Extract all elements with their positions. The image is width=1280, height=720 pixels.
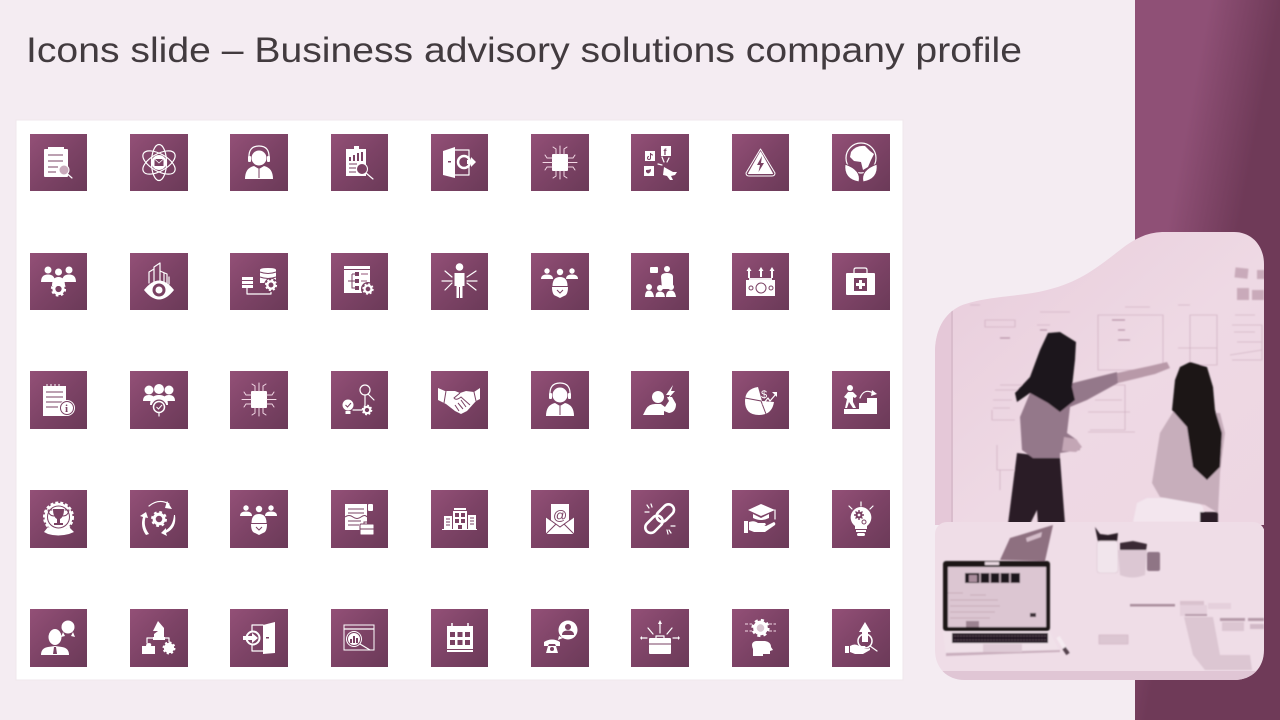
- icon: first aid kit: [832, 253, 890, 310]
- icon: circuit chip: [531, 134, 589, 191]
- photo: women at whiteboard and desk with laptop: [935, 230, 1265, 682]
- icon: graduation cap in hand: [732, 490, 789, 548]
- table surface: [935, 522, 1265, 682]
- icon: calendar: [431, 609, 488, 667]
- icon: high voltage warning: [732, 134, 789, 191]
- icon: chess knight strategy: [130, 609, 188, 667]
- icon: email envelope: @: [553, 507, 567, 523]
- icon: climbing stairs: [832, 371, 890, 429]
- icon: headset agent: [531, 371, 589, 429]
- icon: gear cycle: [130, 490, 188, 548]
- back laptop: [1000, 525, 1053, 561]
- front laptop: [943, 561, 1060, 656]
- icon: light bulb with gears: [832, 490, 890, 548]
- icon: briefcase expansion: [631, 609, 689, 667]
- icon: strength with lightning: [631, 371, 689, 429]
- icon: telephone contact: [531, 609, 589, 667]
- icon: database with gear: [230, 253, 288, 310]
- icon: door with gear arrow: [431, 134, 488, 191]
- icon: team with check badge: [130, 371, 188, 429]
- icon: person with directions: [431, 253, 488, 310]
- icon: head with gear idea: [732, 609, 789, 667]
- icon: eye with city: [130, 253, 188, 310]
- icon: hand with search arrow: [832, 609, 890, 667]
- icon: money rising: [732, 253, 789, 310]
- chair: [1133, 498, 1205, 522]
- icon: office buildings: [431, 490, 488, 548]
- title: Icons slide – Business advisory solutions company profile: [26, 30, 1022, 70]
- icon: atom with envelope: [130, 134, 188, 191]
- icon: browser analytics: [331, 609, 388, 667]
- icon: workers with gear: [230, 490, 288, 548]
- icon: clipboard with magnifier: [30, 134, 87, 191]
- icon: email envelope: [531, 490, 589, 548]
- icon: workers with gear: [531, 253, 589, 310]
- icon: notepad with info: i: [65, 403, 68, 415]
- icon: globe with leaves: [832, 134, 890, 191]
- icon: broken link: [631, 490, 689, 548]
- icon: document with briefcase: [331, 490, 388, 548]
- icon: social media megaphone: f: [664, 147, 668, 157]
- icon: circuit chip: [230, 371, 288, 429]
- icon: presenter at podium: [631, 253, 689, 310]
- icon: pie chart with dollar growth: [732, 371, 789, 429]
- icon: pie chart with dollar growth: $: [761, 389, 767, 401]
- plant pots: [1095, 527, 1160, 578]
- marker pen: [1058, 637, 1066, 650]
- icon: team with gear: [30, 253, 87, 310]
- sticky notes: [1235, 267, 1265, 300]
- icon: handshake: [431, 371, 488, 429]
- icon: headset agent: [230, 134, 288, 191]
- icon: trophy badge: [30, 490, 87, 548]
- icon: notepad with info: [30, 371, 87, 429]
- icon: employee with award: [30, 609, 87, 667]
- woman facing board: [1152, 362, 1225, 524]
- icon: report with magnifier: [331, 134, 388, 191]
- icon: social media megaphone: [631, 134, 689, 191]
- woman pointing: [1008, 332, 1170, 524]
- right decorative band: [1135, 0, 1280, 720]
- icon: idea process path: [331, 371, 388, 429]
- icon: org chart settings: [331, 253, 388, 310]
- panel: icon grid: [16, 120, 903, 680]
- icon: enter door: [230, 609, 288, 667]
- whiteboard sketches: [970, 305, 1262, 490]
- paper notes on table: [1099, 601, 1264, 670]
